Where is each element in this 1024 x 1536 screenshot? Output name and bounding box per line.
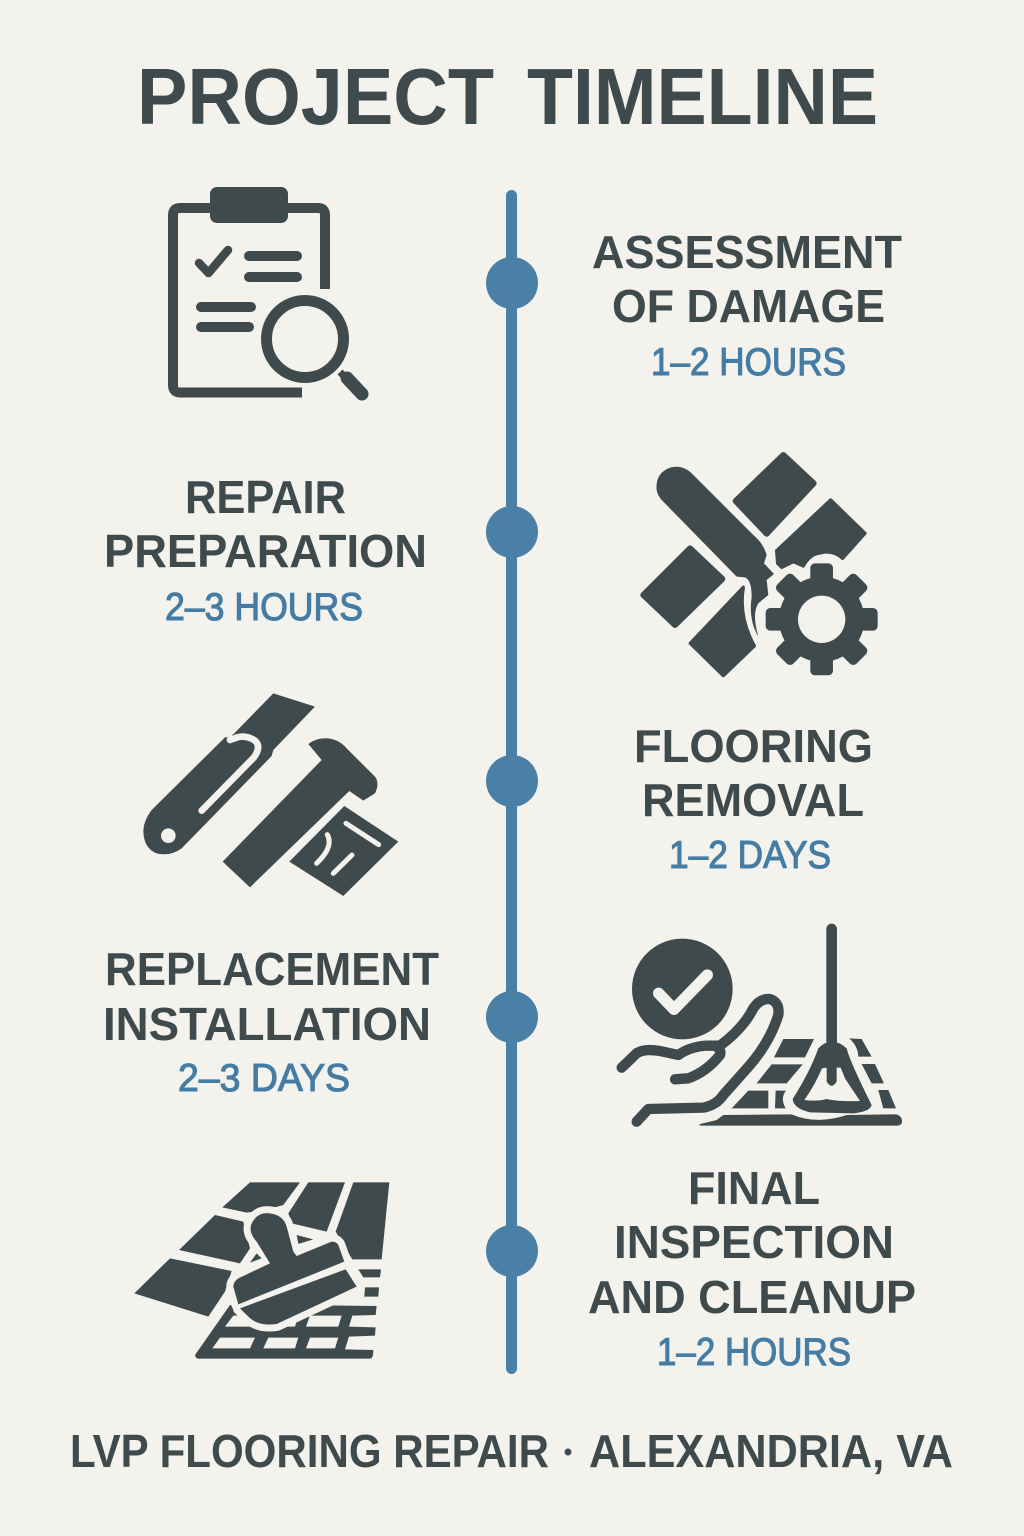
step 1 text: assessment of damage: 1–2 HOURS bbox=[651, 341, 846, 384]
step 1 text: assessment of damage: OF DAMAGE bbox=[612, 280, 885, 332]
step 4 text: replacement installation: 2–3 DAYS bbox=[178, 1057, 350, 1100]
icon: clipboard with magnifier bbox=[173, 187, 362, 394]
step 2 text: repair preparation bbox=[104, 471, 427, 629]
footer: ALEXANDRIA, VA bbox=[589, 1425, 953, 1477]
step 5 text: final inspection and cleanup bbox=[588, 1162, 916, 1374]
title: PROJECT bbox=[137, 52, 494, 141]
footer bbox=[70, 1425, 953, 1477]
icon: damaged planks with gear bbox=[643, 455, 878, 676]
icon: squeegee on planks bbox=[134, 1182, 389, 1359]
step 2 text: repair preparation: PREPARATION bbox=[104, 525, 427, 577]
step 3 text: flooring removal: FLOORING bbox=[634, 720, 873, 772]
icon: check badge, hand, mop and floor bbox=[622, 929, 902, 1126]
step 3 text: flooring removal: REMOVAL bbox=[642, 774, 864, 826]
step 1 text: assessment of damage bbox=[592, 226, 902, 384]
step 2 text: repair preparation: REPAIR bbox=[185, 471, 346, 523]
step 5 text: final inspection and cleanup: FINAL bbox=[688, 1162, 820, 1214]
step 5 text: final inspection and cleanup: 1–2 HOURS bbox=[657, 1331, 851, 1374]
footer: LVP FLOORING REPAIR bbox=[70, 1425, 549, 1477]
step 4 text: replacement installation: INSTALLATION bbox=[103, 998, 431, 1050]
step 5 text: final inspection and cleanup: INSPECTION bbox=[614, 1216, 894, 1268]
step 1 text: assessment of damage: ASSESSMENT bbox=[592, 226, 902, 278]
step 3 text: flooring removal: 1–2 DAYS bbox=[669, 834, 831, 877]
step 2 text: repair preparation: 2–3 HOURS bbox=[165, 586, 363, 629]
timeline bbox=[486, 190, 538, 1374]
title: TIMELINE bbox=[527, 52, 878, 141]
step 4 text: replacement installation bbox=[103, 943, 439, 1100]
step 5 text: final inspection and cleanup: AND CLEANUP bbox=[588, 1271, 916, 1323]
step 4 text: replacement installation: REPLACEMENT bbox=[105, 943, 439, 995]
title bbox=[137, 52, 878, 141]
step 3 text: flooring removal bbox=[634, 720, 873, 877]
icon: utility knife, hammer and card bbox=[143, 693, 398, 896]
